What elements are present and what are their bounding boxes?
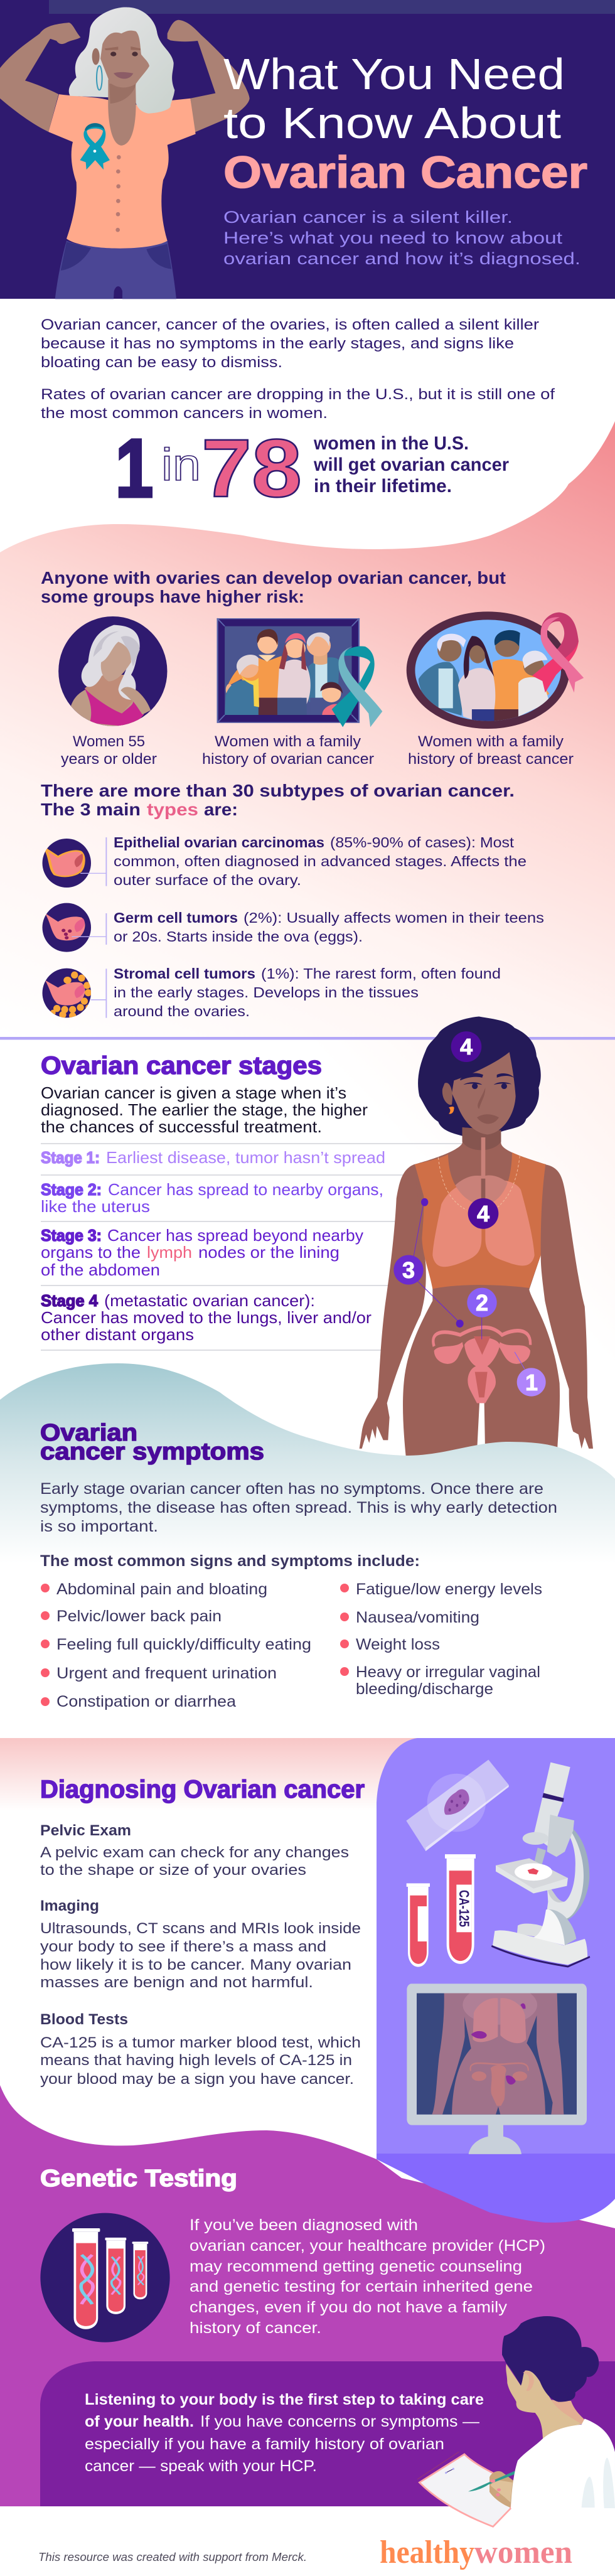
text: stages intro: diagnosed. The earlier the stage, the higher — [41, 1100, 368, 1119]
title — [223, 50, 587, 198]
intro text: the most common cancers in women. — [41, 405, 328, 422]
text: stromal cell tumor — [114, 965, 501, 1019]
heading: higher risk groups: some groups have higher risk: — [41, 587, 304, 606]
intro text: Ovarian cancer, cancer of the ovaries, is often called a silent killer — [41, 316, 539, 333]
text: call to action: of your health. — [85, 2413, 194, 2430]
icon: test tubes with DNA — [40, 2213, 170, 2343]
panel: stages background — [0, 1037, 615, 1366]
text: symptoms intro: is so important. — [40, 1518, 158, 1535]
panel: diagnosing background — [0, 1738, 615, 1901]
icon: microscope — [491, 1763, 590, 1967]
text: stage 3: of the abdomen — [41, 1260, 160, 1279]
stage marker numbers: 4 — [460, 1034, 473, 1060]
stage marker numbers: 4 — [477, 1201, 489, 1226]
heading: symptoms: cancer symptoms — [40, 1439, 264, 1465]
text: genetic testing: and genetic testing for certain inherited gene — [190, 2278, 533, 2295]
heading: higher risk groups — [41, 568, 506, 606]
text: stage 3: Stage 3: — [41, 1226, 102, 1245]
text: stage 2: Cancer has spread to nearby organs, — [108, 1180, 383, 1199]
captions: risk groups: history of ovarian cancer — [202, 751, 374, 768]
text: genetic testing: changes, even if you do not have a family — [190, 2299, 508, 2316]
text: imaging: Imaging — [40, 1897, 99, 1914]
icon: family portrait with teal ribbon — [217, 618, 382, 727]
icon: epithelial carcinoma — [43, 837, 107, 888]
statistic: 1 in 78: in their lifetime. — [314, 476, 452, 496]
label: CA-125: CA-125 — [456, 1890, 472, 1927]
list: symptoms left column — [41, 1580, 311, 1710]
text: epithelial carcinoma: (85%-90% of cases): Most — [330, 834, 515, 851]
text: stage 1: Earliest disease, tumor hasn’t spread — [106, 1148, 385, 1167]
header subtitle — [223, 208, 580, 268]
text: stages intro: the chances of successful treatment. — [41, 1117, 322, 1136]
statistic: 1 in 78: 78 — [201, 422, 302, 514]
text: stage 2: like the uterus — [41, 1197, 150, 1216]
panel: symptoms background wave — [0, 1363, 615, 1738]
heading: ovarian cancer stages: Ovarian cancer stages — [41, 1052, 322, 1080]
text: stage 4: other distant organs — [41, 1325, 194, 1344]
list: symptoms left column: Feeling full quickly/difficulty eating — [56, 1636, 311, 1653]
text: stage 4: Cancer has moved to the lungs, liver and/or — [41, 1308, 372, 1327]
text: signs heading: The most common signs and symptoms include: — [40, 1552, 420, 1570]
text: stromal cell tumor: around the ovaries. — [114, 1003, 250, 1019]
text: stage 1: Stage 1: — [41, 1148, 100, 1167]
text: blood tests — [40, 2011, 361, 2088]
text: epithelial carcinoma: common, often diagnosed in advanced stages. Affects the — [114, 853, 527, 869]
stage marker numbers: 2 — [476, 1290, 488, 1316]
list: symptoms left column: Abdominal pain and bloating — [56, 1580, 267, 1598]
text: stromal cell tumor: Stromal cell tumors — [114, 965, 255, 982]
text: stages intro: Ovarian cancer is given a stage when it’s — [41, 1083, 346, 1102]
text: stage 3: lymph — [147, 1243, 192, 1262]
list: symptoms right column: Nausea/vomiting — [356, 1609, 479, 1626]
text: germ cell tumor — [114, 910, 544, 945]
text: symptoms intro: Early stage ovarian cancer often has no symptoms. Once there are — [40, 1480, 543, 1498]
text: call to action: especially if you have a family history of ovarian — [85, 2435, 444, 2453]
intro text: bloating can be easy to dismiss. — [41, 354, 282, 371]
statistic: 1 in 78: 1 — [115, 422, 153, 514]
panel: call to action — [40, 2361, 615, 2506]
illustration: woman writing on clipboard — [417, 2316, 615, 2526]
title: to Know About — [223, 99, 561, 148]
panel: violet diagnostics column — [377, 1738, 615, 2154]
list: symptoms right column: Heavy or irregular vaginal — [356, 1663, 540, 1681]
title: Ovarian Cancer — [223, 148, 587, 198]
heading: symptoms — [40, 1420, 264, 1465]
logo: healthywomen: women — [474, 2535, 572, 2570]
text: blood tests: Blood Tests — [40, 2011, 128, 2028]
heading: subtypes — [41, 781, 515, 819]
text: imaging — [40, 1897, 361, 1991]
text: stromal cell tumor: (1%): The rarest form, often found — [261, 965, 501, 982]
stage marker numbers — [402, 1034, 538, 1395]
panel: darker violet wave — [377, 2154, 615, 2223]
text: call to action: Listening to your body is the first step to taking care — [85, 2391, 484, 2408]
text: blood tests: your blood may be a sign you have cancer. — [40, 2071, 354, 2088]
text: genetic testing: may recommend getting genetic counseling — [190, 2258, 522, 2275]
header subtitle: Here’s what you need to know about — [223, 228, 563, 247]
text: blood tests: means that having high levels of CA-125 in — [40, 2052, 352, 2069]
text: genetic testing — [190, 2216, 545, 2337]
icon: woman 55 or older — [58, 616, 167, 727]
heading: subtypes: are: — [204, 800, 238, 819]
heading: diagnosing: Diagnosing Ovarian cancer — [40, 1776, 365, 1803]
footer credit: This resource was created with support from Merck. — [38, 2551, 307, 2563]
list: symptoms right column — [340, 1580, 542, 1698]
text: stage 3 — [41, 1226, 363, 1279]
text: imaging: masses are benign and not harmful. — [40, 1974, 313, 1991]
stage marker numbers: 3 — [402, 1257, 415, 1283]
text: blood tests: CA-125 is a tumor marker blood test, which — [40, 2034, 361, 2051]
heading: subtypes: There are more than 30 subtypes of ovarian cancer. — [41, 781, 515, 800]
icon: stromal cell tumor — [43, 969, 107, 1019]
text: call to action — [85, 2391, 484, 2475]
text: call to action: If you have concerns or symptoms — — [200, 2413, 479, 2430]
text: stage 3: Cancer has spread beyond nearby — [107, 1226, 363, 1245]
text: pelvic exam: to the shape or size of your ovaries — [40, 1862, 306, 1879]
captions: risk groups: years or older — [61, 751, 157, 768]
panel: magenta genetic testing background — [0, 2085, 615, 2506]
intro text: because it has no symptoms in the early stages, and signs like — [41, 335, 514, 352]
text: genetic testing: If you’ve been diagnosed with — [190, 2216, 418, 2234]
text: stage 3: nodes or the lining — [198, 1243, 340, 1262]
heading: genetic testing: Genetic Testing — [40, 2165, 237, 2192]
text: germ cell tumor: (2%): Usually affects women in their teens — [243, 910, 544, 926]
statistic: 1 in 78 — [115, 422, 509, 514]
intro text — [41, 316, 555, 422]
statistic: 1 in 78: will get ovarian cancer — [313, 454, 509, 475]
stage dividers — [41, 1143, 468, 1351]
icon: test tubes with CA-125 label — [407, 1854, 476, 1967]
text: stage 2 — [41, 1180, 383, 1216]
logo: healthywomen — [380, 2535, 572, 2570]
text: epithelial carcinoma: Epithelial ovarian carcinomas — [114, 834, 324, 851]
heading: higher risk groups: Anyone with ovaries can develop ovarian cancer, but — [41, 568, 506, 588]
text: imaging: Ultrasounds, CT scans and MRIs look inside — [40, 1920, 361, 1937]
text: stage 3: organs to the — [41, 1243, 141, 1262]
icon: microscope slide — [406, 1759, 509, 1851]
captions: risk groups: history of breast cancer — [408, 751, 574, 768]
captions: risk groups: Women with a family — [418, 733, 564, 750]
statistic: 1 in 78: in — [161, 440, 201, 490]
list: symptoms right column: Fatigue/low energy levels — [356, 1580, 542, 1598]
illustration: woman flexing arms with teal ribbon — [0, 8, 250, 299]
text: symptoms intro — [40, 1480, 557, 1535]
captions: risk groups: Women 55 — [73, 733, 145, 750]
text: stromal cell tumor: in the early stages. Develops in the tissues — [114, 984, 419, 1001]
panel: pink risk and types background — [0, 421, 615, 1037]
heading: subtypes: types — [147, 800, 198, 819]
text: stage 2: Stage 2: — [41, 1180, 102, 1199]
intro text: Rates of ovarian cancer are dropping in the U.S., but it is still one of — [41, 386, 555, 403]
list: symptoms left column: Constipation or diarrhea — [56, 1693, 236, 1710]
text: germ cell tumor: or 20s. Starts inside the ova (eggs). — [114, 928, 363, 945]
text: stage 4: (metastatic ovarian cancer): — [104, 1291, 315, 1310]
statistic: 1 in 78: women in the U.S. — [313, 433, 469, 454]
text: stages intro — [41, 1083, 368, 1136]
list: symptoms right column: bleeding/discharge — [356, 1680, 493, 1698]
list: symptoms left column: Pelvic/lower back pain — [56, 1607, 222, 1625]
text: genetic testing: history of cancer. — [190, 2319, 321, 2337]
logo: healthywomen: healthy — [380, 2535, 474, 2570]
heading: symptoms: Ovarian — [40, 1420, 137, 1446]
header subtitle: Ovarian cancer is a silent killer. — [223, 208, 513, 227]
icon: scan monitor — [407, 1983, 587, 2154]
header subtitle: ovarian cancer and how it’s diagnosed. — [223, 249, 580, 268]
panel: header background — [0, 0, 615, 299]
text: epithelial carcinoma: outer surface of the ovary. — [114, 872, 301, 888]
text: imaging: your body to see if there’s a mass and — [40, 1938, 326, 1955]
illustration: body with numbered stage markers — [360, 1017, 593, 1460]
text: stage 4: Stage 4 — [41, 1291, 99, 1310]
list: symptoms left column: Urgent and frequent urination — [56, 1665, 277, 1682]
stage marker numbers: 1 — [525, 1370, 538, 1395]
text: pelvic exam: Pelvic Exam — [40, 1822, 131, 1839]
title: What You Need — [223, 50, 565, 99]
text: symptoms intro: symptoms, the disease has often spread. This is why early detection — [40, 1499, 557, 1516]
text: epithelial carcinoma — [114, 834, 527, 888]
icon: oval portrait with pink ribbon — [407, 611, 584, 729]
captions: risk groups — [61, 733, 574, 768]
captions: risk groups: Women with a family — [215, 733, 361, 750]
text: call to action: cancer — speak with your HCP. — [85, 2457, 317, 2475]
text: pelvic exam — [40, 1822, 349, 1879]
icon: germ cell tumor — [43, 903, 107, 952]
heading: subtypes: The 3 main — [41, 800, 141, 819]
text: germ cell tumor: Germ cell tumors — [114, 910, 238, 926]
text: pelvic exam: A pelvic exam can check for any changes — [40, 1844, 349, 1861]
list: symptoms right column: Weight loss — [356, 1636, 440, 1653]
text: genetic testing: ovarian cancer, your healthcare provider (HCP) — [190, 2237, 545, 2255]
text: imaging: how likely it is to be cancer. Many ovarian — [40, 1956, 351, 1973]
text: stage 4 — [41, 1291, 372, 1344]
